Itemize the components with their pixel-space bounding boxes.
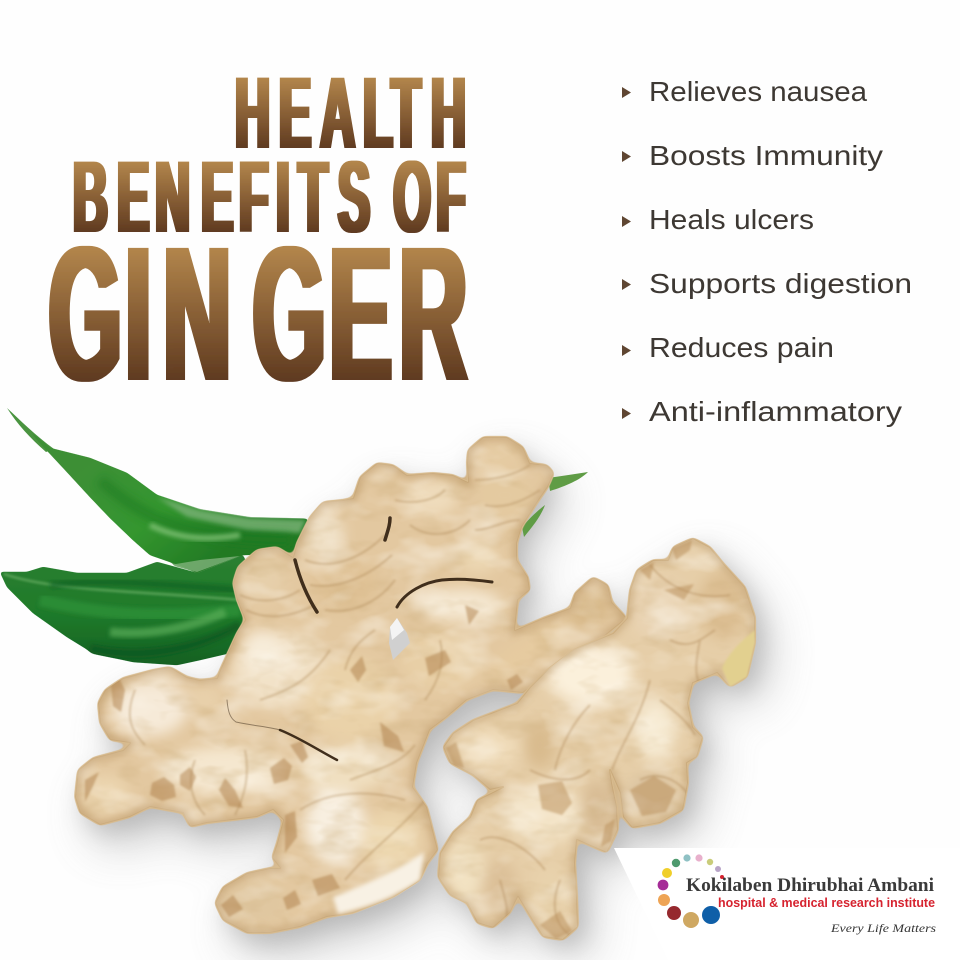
item: supports digestion: Supports digestion	[649, 268, 912, 299]
logo mark: ring of dots	[658, 854, 724, 928]
ginger root: right rhizome	[430, 530, 760, 945]
item: boosts immunity: Boosts Immunity	[649, 140, 883, 171]
benefits list	[622, 76, 912, 427]
logo panel	[614, 848, 960, 960]
cut tip of ginger	[722, 630, 755, 687]
title line: benefits of: BENEFITS OF	[73, 140, 465, 254]
dark creases	[227, 518, 492, 760]
item: reduces pain: Reduces pain	[649, 332, 834, 363]
item: heals ulcers: Heals ulcers	[649, 204, 814, 235]
edge darkening	[438, 538, 755, 940]
shading: right	[447, 571, 746, 927]
logo background	[614, 848, 960, 960]
leaf: lower	[0, 555, 262, 665]
item: relieves nausea: Relieves nausea	[649, 76, 867, 107]
title line: ginger: GINGER	[49, 207, 467, 422]
leaf: small tips behind ginger	[522, 472, 588, 537]
logo tagline: Every Life Matters	[830, 921, 936, 935]
white cut surface	[333, 852, 424, 914]
item: anti-inflammatory: Anti-inflammatory	[649, 396, 902, 427]
gap between lobes	[389, 618, 410, 660]
texture mottling	[84, 448, 569, 890]
title line: health: HEALTH	[235, 56, 466, 170]
title: health benefits of ginger	[49, 56, 467, 422]
tighter contact shadow	[81, 447, 763, 948]
leaves	[0, 408, 588, 665]
soft drop shadow under ginger	[89, 461, 771, 960]
logo subtitle: hospital & medical research institute	[718, 895, 935, 910]
ginger root: main rhizome	[60, 430, 640, 940]
edge darkening	[75, 437, 627, 933]
shading: main	[84, 478, 610, 870]
brown patches	[85, 605, 523, 917]
skin marks	[480, 565, 730, 935]
logo name: Kokilaben Dhirubhai Ambani	[686, 875, 934, 896]
texture mottling	[440, 566, 752, 896]
brown patches	[446, 540, 694, 939]
leaf: upper	[7, 408, 308, 573]
skin rings	[130, 465, 540, 880]
leaf: upper tip	[7, 408, 54, 452]
